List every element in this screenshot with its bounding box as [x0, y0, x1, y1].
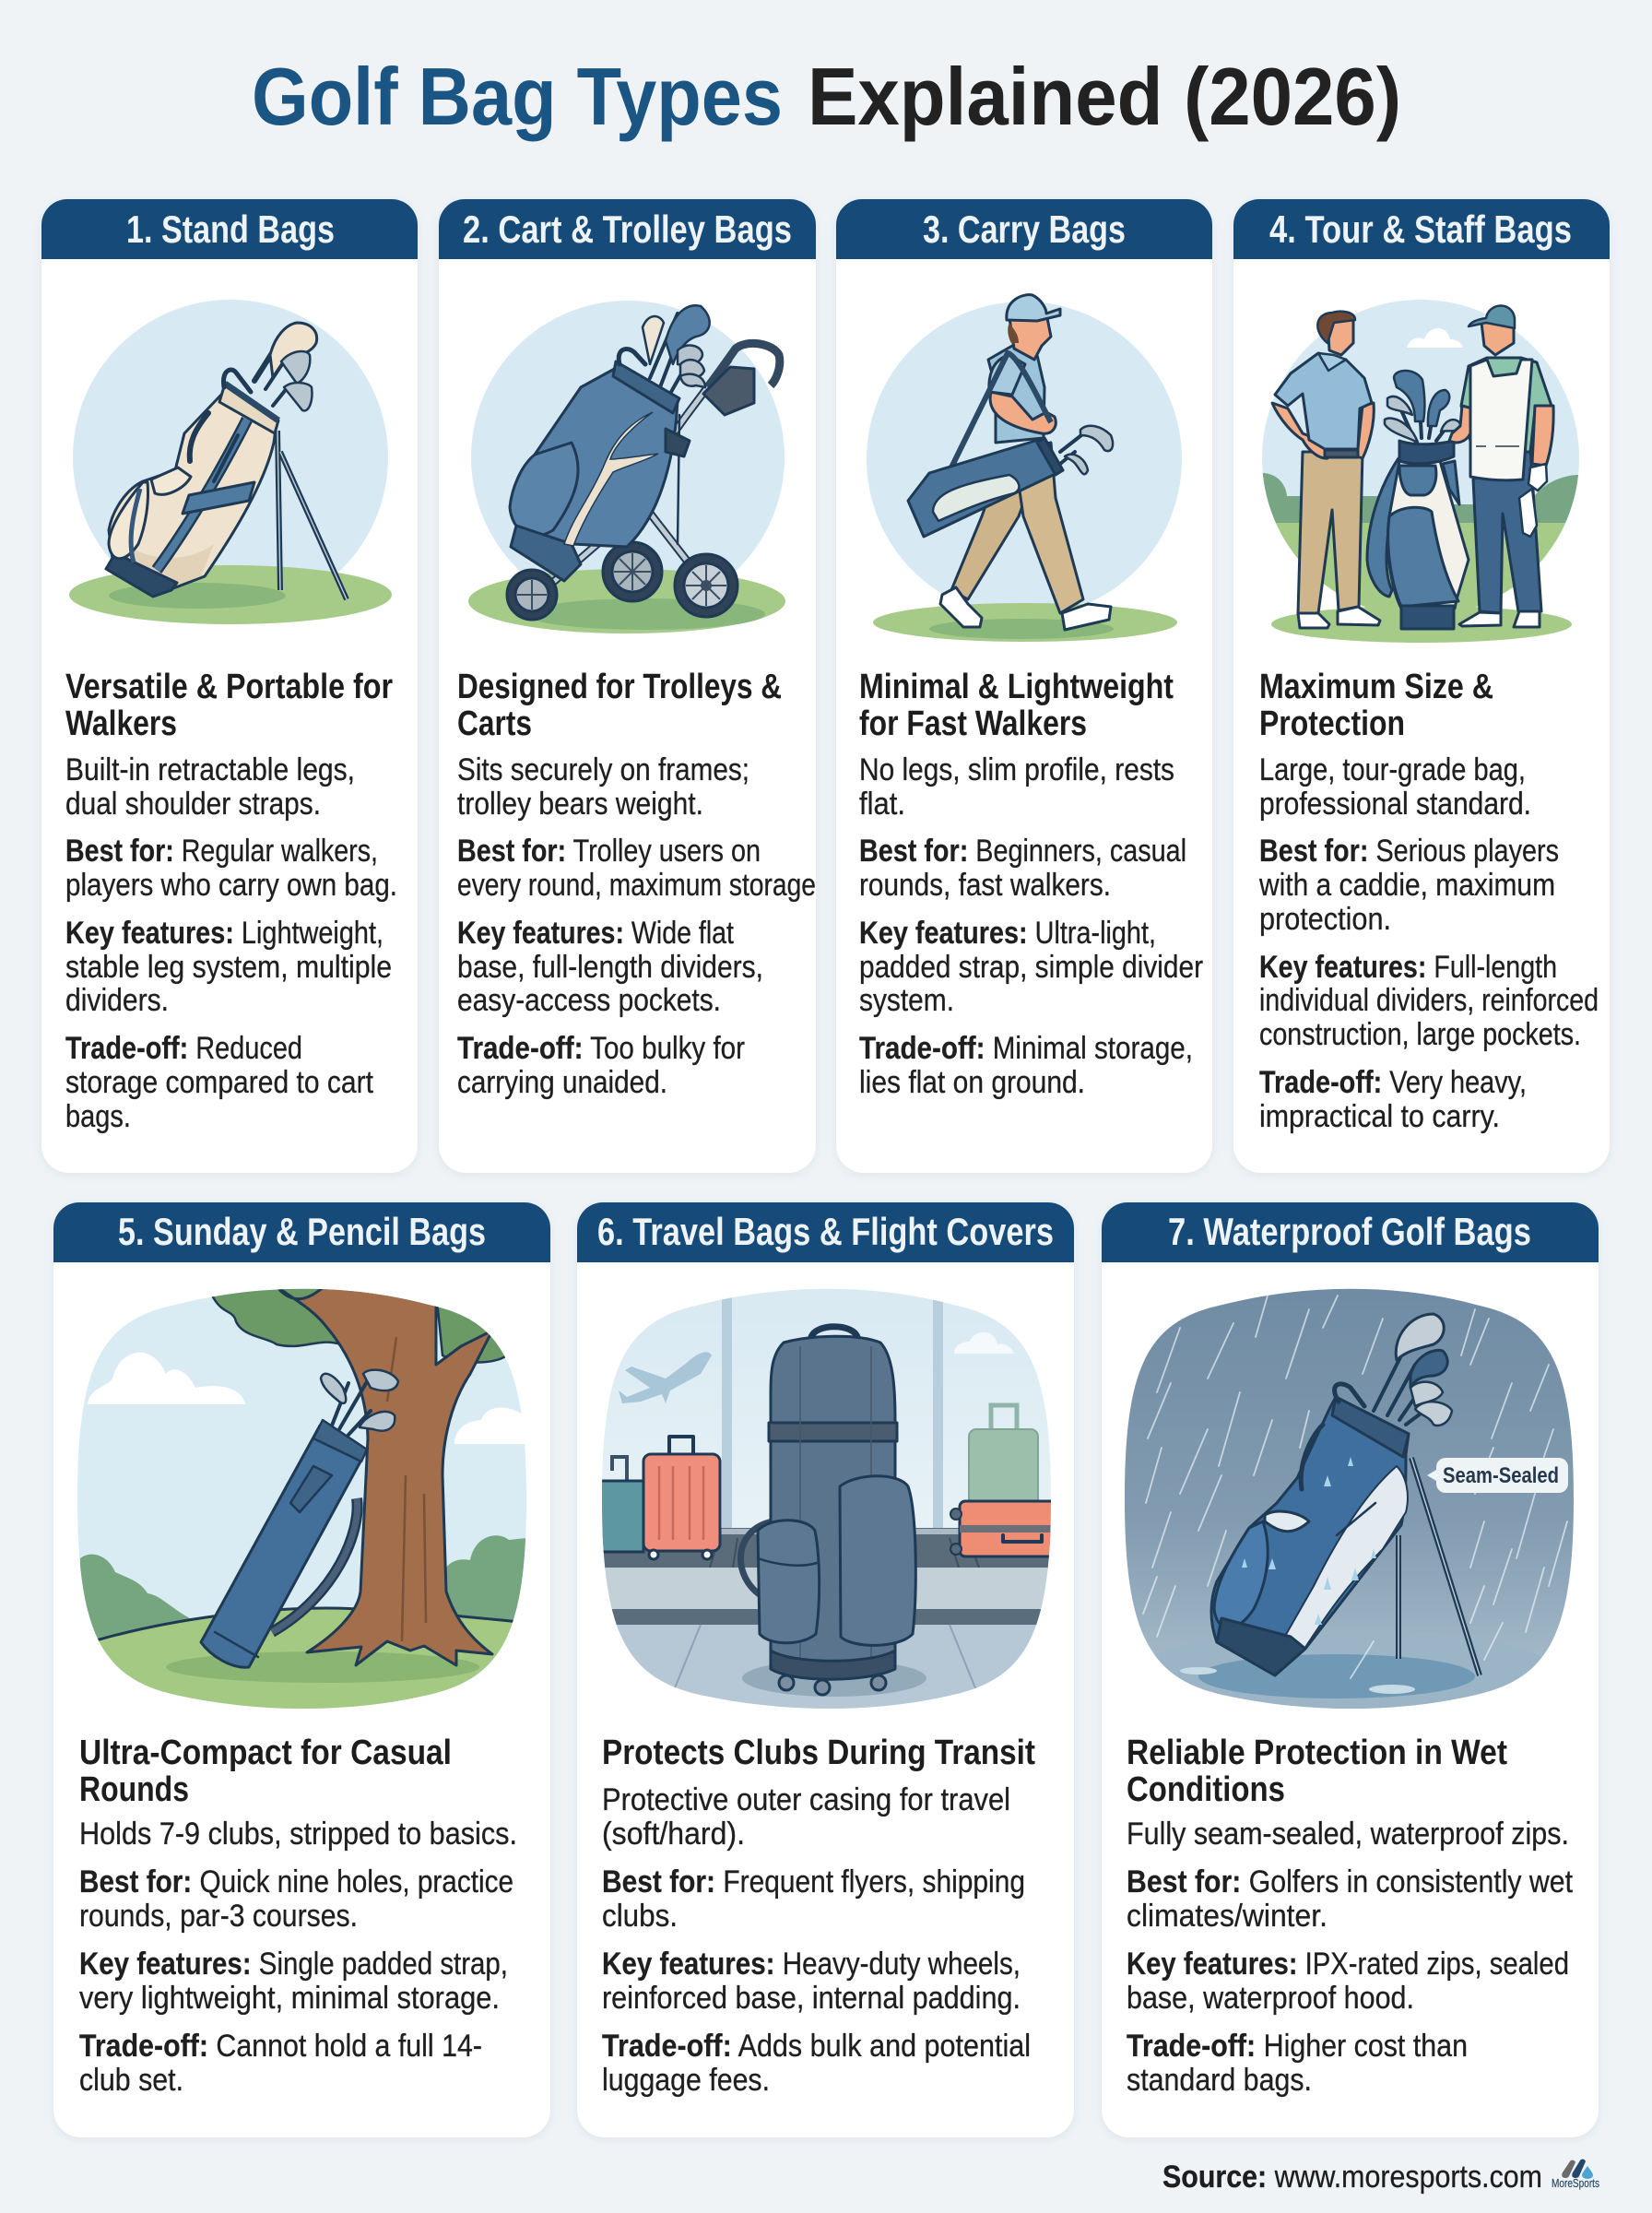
panel: carry bags	[836, 199, 1212, 1173]
text block: waterproof golf bags details: climates/winter.	[1127, 1899, 1328, 1934]
text block: tour and staff bags details: Key features: Full-length	[1259, 950, 1557, 985]
text block: sunday and pencil bags details: Trade-off: Cannot hold a full 14-	[79, 2029, 482, 2064]
text block: tour and staff bags details: professional standard.	[1259, 787, 1531, 822]
header: travel bags and flight covers: 6. Travel Bags & Flight Covers	[597, 1210, 1054, 1253]
header: tour and staff bags: 4. Tour & Staff Bags	[1269, 207, 1572, 251]
subtitle: cart and trolley bags: Designed for Trolleys &	[457, 668, 782, 706]
icon: tour bag with clubs	[1367, 371, 1469, 629]
illustration: pencil bag against tree	[77, 1282, 530, 1724]
text block: tour and staff bags details	[1258, 752, 1599, 1134]
text block: sunday and pencil bags details: very lightweight, minimal storage.	[79, 1981, 500, 2016]
header: tour and staff bags	[1233, 199, 1610, 259]
text block: travel bags details: Best for: Frequent flyers, shipping	[602, 1864, 1025, 1899]
header: stand bags	[41, 199, 418, 259]
header: sunday and pencil bags: 5. Sunday & Pencil Bags	[118, 1210, 486, 1253]
text block: cart and trolley bags details: easy-access pockets.	[457, 983, 721, 1018]
text block: travel bags details: (soft/hard).	[602, 1817, 745, 1852]
text block: tour and staff bags details: protection.	[1259, 902, 1391, 937]
text block: travel bags details: Trade-off: Adds bulk and potential	[602, 2029, 1031, 2064]
header: carry bags: 3. Carry Bags	[923, 207, 1126, 251]
text block: tour and staff bags details: with a caddie, maximum	[1258, 868, 1555, 903]
text block: tour and staff bags details: individual dividers, reinforced	[1259, 983, 1599, 1018]
header: waterproof golf bags: 7. Waterproof Golf Bags	[1168, 1210, 1531, 1253]
text block: stand bags details	[65, 752, 397, 1134]
icon: MoreSports logo	[1552, 2160, 1599, 2190]
text block: sunday and pencil bags details: Best for: Quick nine holes, practice	[79, 1864, 513, 1899]
text block: carry bags details: rounds, fast walkers.	[859, 868, 1111, 903]
text block: cart and trolley bags details: base, full-length dividers,	[457, 950, 763, 985]
subtitle: waterproof golf bags: Reliable Protection in Wet	[1127, 1734, 1507, 1772]
subtitle: stand bags	[65, 668, 393, 743]
text block: carry bags details: system.	[859, 983, 954, 1018]
subtitle: carry bags: for Fast Walkers	[859, 704, 1087, 743]
text block: stand bags details: Key features: Lightweight,	[65, 916, 384, 951]
panel: waterproof golf bags	[1102, 1202, 1599, 2137]
subtitle: cart and trolley bags	[457, 668, 782, 743]
text block: waterproof golf bags details	[1127, 1817, 1573, 2098]
illustration: cart bag on trolley	[468, 301, 785, 633]
text block: carry bags details: lies flat on ground.	[859, 1065, 1085, 1100]
text block: travel bags details: luggage fees.	[602, 2063, 770, 2098]
text block: sunday and pencil bags details: rounds, par-3 courses.	[79, 1899, 358, 1934]
subtitle: cart and trolley bags: Carts	[457, 704, 532, 743]
text block: cart and trolley bags details: Sits securely on frames;	[457, 752, 749, 787]
header: cart and trolley bags: 2. Cart & Trolley Bags	[463, 207, 792, 251]
panel: cart and trolley bags	[439, 199, 816, 1173]
subtitle: tour and staff bags	[1259, 668, 1493, 743]
subtitle: carry bags	[859, 668, 1174, 743]
illustration: travel bag at airport	[590, 1282, 1061, 1717]
title: Explained (2026)	[808, 51, 1401, 142]
title: Golf Bag Types	[252, 51, 783, 142]
text block: stand bags details: players who carry own bag.	[65, 868, 397, 903]
text block: cart and trolley bags details: carrying unaided.	[457, 1065, 667, 1100]
header: waterproof golf bags	[1102, 1202, 1599, 1262]
text block: carry bags details: No legs, slim profile, rests	[859, 752, 1174, 787]
text block: stand bags details: Best for: Regular walkers,	[65, 834, 378, 869]
text block: sunday and pencil bags details	[79, 1817, 517, 2098]
text block: cart and trolley bags details: every round, maximum storage	[457, 868, 816, 903]
illustration: golfer carrying bag	[867, 295, 1182, 642]
text block: carry bags details: Key features: Ultra-light,	[859, 916, 1156, 951]
text block: stand bags details: storage compared to cart	[65, 1065, 373, 1100]
text block: waterproof golf bags details: Fully seam-sealed, waterproof zips.	[1127, 1817, 1569, 1852]
icon: MoreSports logo: MoreSports	[1552, 2176, 1599, 2190]
text block: carry bags details: flat.	[859, 787, 905, 822]
panel: sunday and pencil bags	[53, 1202, 550, 2137]
text block: tour and staff bags details: Large, tour-grade bag,	[1259, 752, 1526, 787]
title	[252, 51, 1401, 142]
text block: cart and trolley bags details	[457, 752, 816, 1100]
subtitle: sunday and pencil bags: Rounds	[79, 1770, 189, 1809]
text block: cart and trolley bags details: trolley bears weight.	[457, 787, 703, 822]
subtitle: tour and staff bags: Maximum Size &	[1259, 668, 1493, 706]
text block: stand bags details: Trade-off: Reduced	[65, 1031, 302, 1066]
text block: tour and staff bags details: impractical to carry.	[1259, 1099, 1500, 1134]
text block: carry bags details: Best for: Beginners, casual	[859, 834, 1186, 869]
callout: seam-sealed	[1427, 1458, 1568, 1493]
text block: stand bags details: dividers.	[65, 983, 169, 1018]
subtitle: tour and staff bags: Protection	[1259, 704, 1405, 743]
callout: seam-sealed: Seam-Sealed	[1443, 1463, 1559, 1488]
text block: travel bags details	[602, 1782, 1031, 2098]
text block: cart and trolley bags details: Best for: Trolley users on	[457, 834, 761, 869]
text block: sunday and pencil bags details: Key features: Single padded strap,	[79, 1947, 508, 1982]
text block: tour and staff bags details: Trade-off: Very heavy,	[1259, 1065, 1527, 1100]
header: carry bags	[836, 199, 1212, 259]
figure: player	[1272, 312, 1380, 628]
subtitle: travel bags: Protects Clubs During Transit	[602, 1734, 1035, 1772]
header: sunday and pencil bags	[53, 1202, 550, 1262]
text block: travel bags details: clubs.	[602, 1899, 678, 1934]
subtitle: waterproof golf bags	[1127, 1734, 1507, 1809]
text block: travel bags details: Key features: Heavy-duty wheels,	[602, 1947, 1021, 1982]
text block: cart and trolley bags details: Key features: Wide flat	[457, 916, 734, 951]
text block: waterproof golf bags details: Best for: Golfers in consistently wet	[1127, 1864, 1573, 1899]
illustration: player and caddie with tour bag	[1262, 300, 1579, 643]
text block: waterproof golf bags details: standard bags.	[1127, 2063, 1312, 2098]
text block: waterproof golf bags details: Key features: IPX-rated zips, sealed	[1127, 1947, 1569, 1982]
text block: travel bags details: Protective outer casing for travel	[602, 1782, 1010, 1817]
text block: stand bags details: Built-in retractable legs,	[65, 752, 355, 787]
figure: caddie	[1449, 305, 1553, 627]
text block: carry bags details	[859, 752, 1203, 1100]
header: travel bags and flight covers	[577, 1202, 1074, 1262]
text block: tour and staff bags details: Best for: Serious players	[1259, 834, 1559, 869]
subtitle: carry bags: Minimal & Lightweight	[859, 668, 1174, 706]
header: stand bags: 1. Stand Bags	[126, 207, 335, 251]
text block: carry bags details: padded strap, simple divider	[859, 950, 1203, 985]
subtitle: sunday and pencil bags: Ultra-Compact for Casual	[79, 1734, 452, 1772]
text block: waterproof golf bags details: base, waterproof hood.	[1127, 1981, 1414, 2016]
header: cart and trolley bags	[439, 199, 816, 259]
subtitle: stand bags: Versatile & Portable for	[65, 668, 393, 706]
subtitle: stand bags: Walkers	[65, 704, 177, 743]
illustration: waterproof bag in rain	[1125, 1282, 1574, 1715]
illustration: stand bag on grass	[69, 300, 392, 624]
subtitle: waterproof golf bags: Conditions	[1127, 1770, 1285, 1809]
text block: sunday and pencil bags details: Holds 7-9 clubs, stripped to basics.	[79, 1817, 517, 1852]
text block: carry bags details: Trade-off: Minimal storage,	[859, 1031, 1193, 1066]
text block: waterproof golf bags details: Trade-off: Higher cost than	[1127, 2029, 1468, 2064]
text block: stand bags details: dual shoulder straps.	[65, 787, 321, 822]
text block: travel bags details: reinforced base, internal padding.	[602, 1981, 1021, 2016]
panel: travel bags and flight covers	[577, 1202, 1074, 2137]
text block: cart and trolley bags details: Trade-off: Too bulky for	[457, 1031, 745, 1066]
panel: stand bags	[41, 199, 418, 1173]
text block: sunday and pencil bags details: club set.	[79, 2063, 183, 2098]
source line: Source: www.moresports.com	[1162, 2160, 1542, 2195]
panel: tour and staff bags	[1233, 199, 1610, 1173]
text block: tour and staff bags details: construction, large pockets.	[1259, 1017, 1581, 1052]
text block: stand bags details: bags.	[65, 1099, 131, 1134]
subtitle: sunday and pencil bags	[79, 1734, 452, 1809]
text block: stand bags details: stable leg system, multiple	[65, 950, 392, 985]
